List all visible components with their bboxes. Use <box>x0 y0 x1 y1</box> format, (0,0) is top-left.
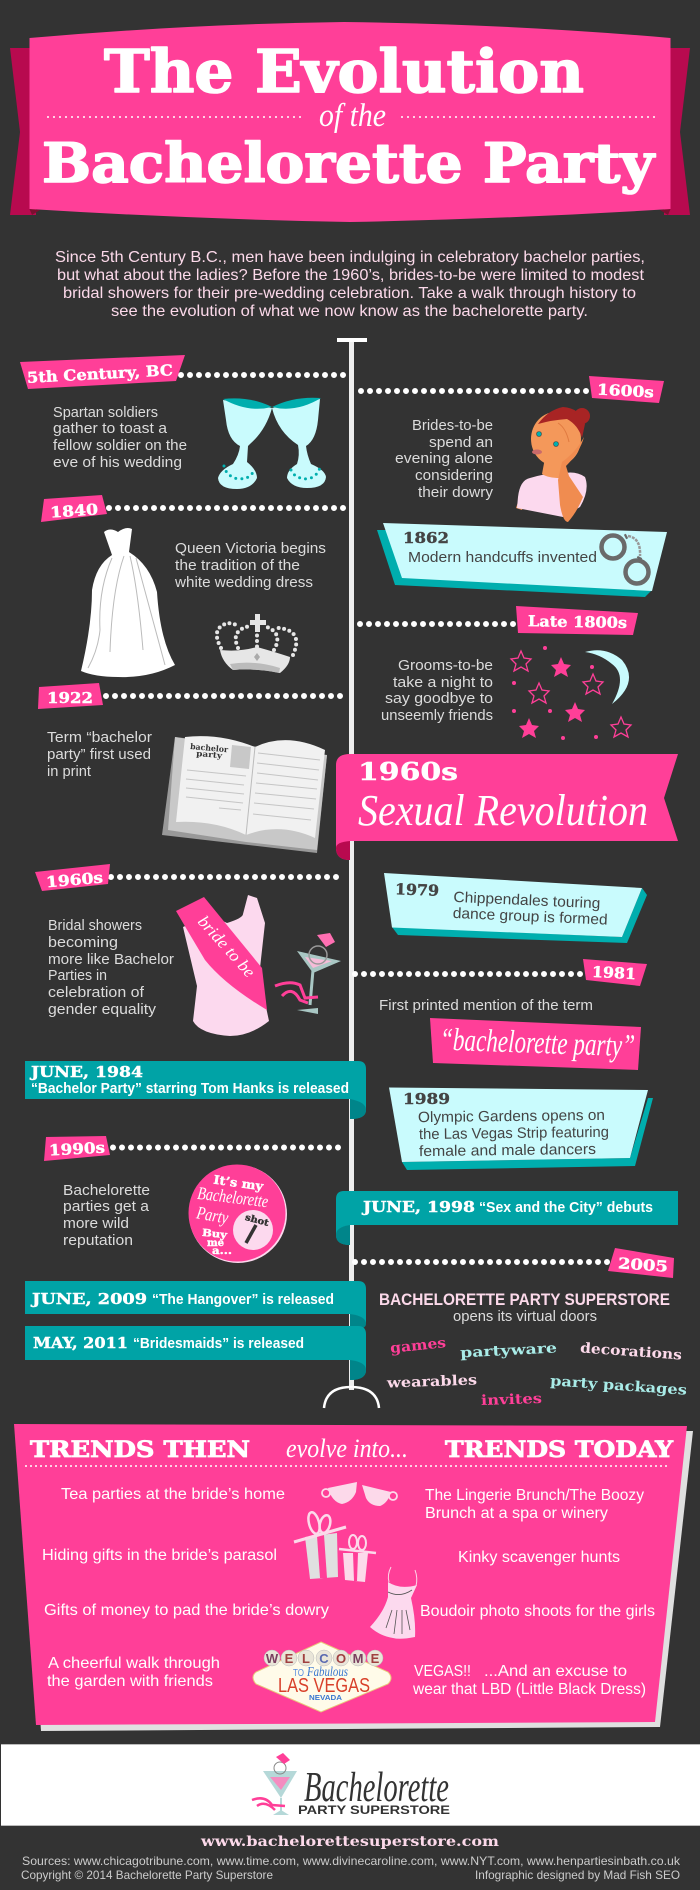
icon: open book <box>162 736 327 853</box>
word cloud: partyware <box>460 1340 558 1361</box>
text: Queen Victoria: Queen Victoria begins <box>175 540 326 557</box>
callout: 1862 handcuffs <box>377 523 667 597</box>
word cloud: games <box>389 1335 447 1357</box>
text: opens virtual doors: opens its virtual doors <box>453 1308 597 1325</box>
icon: white wedding dress <box>81 528 175 677</box>
text: Brides-to-be: their dowry <box>418 484 494 501</box>
icon: Las Vegas sign: O <box>336 1651 346 1666</box>
trends today column: ...And an excuse to <box>484 1663 627 1680</box>
title banner <box>10 22 690 222</box>
icon: night sky <box>511 646 631 740</box>
intro paragraph: Since 5th Century B.C., men have been indulging in celebratory bachelor parties, <box>55 249 645 266</box>
sources and credits <box>21 1854 681 1882</box>
icon: party button: Party <box>194 1202 230 1228</box>
text: bridal showers: gender equality <box>48 1001 157 1018</box>
icon: party button: Buy <box>201 1228 229 1241</box>
text: Brides-to-be: evening alone <box>395 450 493 467</box>
text: bridal showers: more like Bachelor <box>48 951 174 968</box>
callout: 1862 handcuffs: 1862 <box>403 529 449 547</box>
text: Brides-to-be: considering <box>415 467 493 484</box>
tag: 1600s <box>589 376 664 403</box>
callout: 1979 Chippendales: 1979 <box>395 880 439 900</box>
ribbon: June 1984 <box>25 1061 366 1119</box>
tag: 5th Century, BC: 5th Century, BC <box>27 361 173 387</box>
icon: thoughtful woman <box>516 407 590 522</box>
callout: 1989 Olympic Gardens <box>389 1088 653 1170</box>
text: first printed mention: First printed mention of the term <box>379 997 593 1014</box>
icon: open book: party <box>196 748 223 760</box>
panel: trends <box>14 1424 693 1731</box>
icon: Las Vegas sign: L <box>302 1651 310 1666</box>
text: bridal showers: Parties in <box>48 967 107 984</box>
intro paragraph: bridal showers for their pre-wedding celebration. Take a walk through history to <box>63 285 636 302</box>
text: Queen Victoria: the tradition of the <box>175 557 300 574</box>
icon: Las Vegas sign: C <box>319 1651 329 1666</box>
icon: party button: Bachelorette <box>196 1183 269 1211</box>
text: Spartan soldiers: gather to toast a <box>53 420 168 437</box>
icon: teacups <box>322 1482 397 1506</box>
ribbon: June 1984: “Bachelor Party” starring Tom Hanks is released <box>31 1080 349 1097</box>
callout: 1989 Olympic Gardens: 1989 <box>403 1090 450 1108</box>
icon: Las Vegas sign <box>253 1642 391 1712</box>
event: 1600s <box>361 376 664 522</box>
icon: crown <box>217 614 296 673</box>
ribbon: May 2011: MAY, 2011 <box>33 1334 128 1352</box>
tag: 1981 <box>583 959 647 986</box>
text: Grooms-to-be: unseemly friends <box>381 707 493 724</box>
icon: party button: It’s my <box>213 1173 265 1194</box>
tag: 1922 <box>38 683 103 709</box>
sources and credits: Sources: www.chicagotribune.com, www.time.com, www.divinecaroline.com, www.NYT.com, www.henpartiesinbath.co.uk <box>22 1854 681 1868</box>
callout: 1989 Olympic Gardens: Olympic Gardens opens on <box>418 1107 605 1126</box>
ribbon: May 2011 <box>25 1326 366 1380</box>
trends today column: VEGAS!! <box>414 1663 471 1680</box>
title line 2: Bachelorette Party <box>42 131 656 195</box>
event: 1960s <box>35 864 345 1036</box>
icon: party button: a... <box>212 1246 232 1257</box>
text: Brides-to-be: spend an <box>429 434 493 451</box>
icon: martini <box>275 933 341 1014</box>
event: Late 1800s <box>360 606 638 740</box>
event: 1981 <box>355 959 647 1070</box>
text: Spartan soldiers: fellow soldier on the <box>53 437 187 454</box>
icon: party button: me <box>207 1238 224 1249</box>
callout: 1979 Chippendales: dance group is formed <box>452 905 608 929</box>
text: bachelorette parties: reputation <box>63 1232 133 1249</box>
trends then column <box>42 1486 329 1690</box>
text: Grooms-to-be: say goodbye to <box>385 690 493 707</box>
ribbon: June 1984: JUNE, 1984 <box>29 1063 143 1081</box>
text: Queen Victoria: white wedding dress <box>174 574 313 591</box>
sources and credits: Copyright © 2014 Bachelorette Party Superstore <box>21 1868 273 1882</box>
word cloud <box>386 1335 688 1409</box>
icon: Las Vegas sign: M <box>353 1651 363 1666</box>
title line 1: The Evolution <box>104 37 584 106</box>
event: 1990s <box>44 1136 345 1263</box>
text: superstore heading: BACHELORETTE PARTY SUPERSTORE <box>379 1290 670 1309</box>
text: bridal showers <box>48 917 174 1018</box>
icon: party button: shot <box>244 1213 271 1229</box>
trends then column: Gifts of money to pad the bride’s dowry <box>44 1602 329 1619</box>
heading: trends then: TRENDS THEN <box>30 1437 250 1463</box>
tag: Late 1800s <box>516 606 638 635</box>
title connector: of the <box>319 98 386 134</box>
trends then column: the garden with friends <box>47 1673 213 1690</box>
text: bachelorette parties: parties get a <box>63 1198 150 1215</box>
tag: 1960s <box>35 864 110 891</box>
event: 2005 <box>355 1248 688 1409</box>
icon: tank top with sash: bride to be <box>194 912 259 982</box>
text: Queen Victoria <box>174 540 326 591</box>
trends today column: The Lingerie Brunch/The Boozy <box>425 1487 644 1504</box>
tag: 2005: 2005 <box>617 1254 669 1276</box>
ribbon: June 1998: JUNE, 1998 <box>361 1198 475 1216</box>
event: 1840 <box>41 495 345 677</box>
ribbon: May 2011: “Bridesmaids” is released <box>133 1335 304 1352</box>
logo: martini mark <box>252 1753 297 1815</box>
text: Brides-to-be <box>395 417 494 501</box>
logo: tagline: PARTY SUPERSTORE <box>298 1803 450 1817</box>
text: bridal showers: becoming <box>48 934 118 951</box>
icon: party button <box>188 1164 287 1263</box>
icon: tank top with sash <box>176 895 269 1036</box>
word cloud: invites <box>481 1391 542 1409</box>
icon: Las Vegas sign: W <box>266 1651 279 1666</box>
callout: 1862 handcuffs: Modern handcuffs invented <box>408 549 597 566</box>
ribbon: June 2009: “The Hangover” is released <box>152 1291 334 1308</box>
tag: 1600s: 1600s <box>597 381 654 402</box>
website url: www.bachelorettesuperstore.com <box>200 1834 499 1850</box>
text: Spartan soldiers <box>53 404 187 471</box>
trends today column: wear that LBD (Little Black Dress) <box>412 1681 646 1698</box>
icon: open book: bachelor <box>190 741 229 754</box>
text: Grooms-to-be: take a night to <box>393 674 493 691</box>
icon: Las Vegas sign: TO <box>293 1668 304 1679</box>
icon: toasting goblets <box>218 398 326 489</box>
trends then column: Tea parties at the bride’s home <box>61 1486 285 1503</box>
tag: 1840: 1840 <box>50 500 99 522</box>
text: bachelor party first used: party” first used <box>47 746 151 763</box>
tag: 1960s: 1960s <box>45 869 104 891</box>
icon: Las Vegas sign: E <box>285 1651 294 1666</box>
banner: 1960s Sexual Revolution <box>336 754 678 860</box>
footer logo band <box>1 1744 700 1826</box>
sources and credits: Infographic designed by Mad Fish SEO <box>475 1868 680 1882</box>
text: bachelor party first used: in print <box>47 763 92 780</box>
icon: Las Vegas sign: E <box>371 1651 380 1666</box>
tag: 1990s <box>44 1136 110 1161</box>
tag: 1981: 1981 <box>592 963 636 983</box>
event: 1922 <box>38 683 342 853</box>
trends then column: Hiding gifts in the bride’s parasol <box>42 1547 277 1564</box>
tag: 1840 <box>41 495 107 522</box>
callout: 1989 Olympic Gardens: female and male dancers <box>419 1141 596 1160</box>
trends today column: Brunch at a spa or winery <box>425 1505 608 1522</box>
text: bachelor party first used: Term “bachelor <box>47 729 152 746</box>
ribbon: June 2009 <box>25 1281 366 1330</box>
logo: wordmark: Bachelorette <box>304 1765 449 1811</box>
tag: 5th Century, BC <box>20 355 185 389</box>
text: Spartan soldiers: eve of his wedding <box>53 454 182 471</box>
word cloud: wearables <box>386 1372 477 1392</box>
word cloud: decorations <box>580 1340 683 1364</box>
ribbon: June 1998 <box>336 1191 678 1245</box>
heading: evolve into: evolve into... <box>286 1434 408 1463</box>
tag: 2005 <box>608 1248 674 1278</box>
trends today column: Kinky scavenger hunts <box>458 1549 620 1566</box>
ribbon: June 1998: “Sex and the City” debuts <box>479 1199 653 1216</box>
event: 5th Century BC <box>20 355 345 489</box>
ribbon: June 2009: JUNE, 2009 <box>30 1290 147 1308</box>
trends today column: Boudoir photo shoots for the girls <box>420 1603 655 1620</box>
word cloud: party packages <box>550 1373 688 1399</box>
text: bridal showers: Bridal showers <box>48 917 142 934</box>
callout: bachelorette party <box>430 1018 641 1070</box>
callout: 1979 Chippendales: Chippendales touring <box>453 889 601 912</box>
intro paragraph: see the evolution of what we now know as the bachelorette party. <box>111 303 588 320</box>
text: Spartan soldiers: Spartan soldiers <box>53 404 158 421</box>
text: bachelorette parties: Bachelorette <box>63 1182 150 1199</box>
timeline spine <box>324 338 379 1408</box>
text: bachelorette parties <box>63 1182 150 1249</box>
icon: handcuffs <box>602 536 648 584</box>
text: bridal showers: celebration of <box>48 984 145 1001</box>
icon: Las Vegas sign: LAS VEGAS <box>278 1675 370 1697</box>
tag: 1922: 1922 <box>47 689 93 707</box>
icon: Las Vegas sign: Fabulous <box>306 1665 348 1680</box>
icon: gift boxes <box>294 1511 376 1582</box>
text: bachelorette parties: more wild <box>63 1215 129 1232</box>
intro paragraph <box>55 249 645 320</box>
text: Grooms-to-be: Grooms-to-be <box>398 657 493 674</box>
icon: Las Vegas sign: NEVADA <box>309 1695 342 1702</box>
callout: 1989 Olympic Gardens: the Las Vegas Strip featuring <box>419 1124 609 1143</box>
banner: 1960s Sexual Revolution: Sexual Revolution <box>358 786 648 835</box>
icon: lingerie <box>370 1567 417 1639</box>
tag: 1990s: 1990s <box>49 1139 105 1159</box>
banner: 1960s Sexual Revolution: 1960s <box>358 757 458 786</box>
heading: trends today: TRENDS TODAY <box>445 1437 673 1463</box>
text: Brides-to-be: Brides-to-be <box>412 417 493 434</box>
trends then column: A cheerful walk through <box>48 1655 220 1672</box>
text: bachelor party first used <box>47 729 152 780</box>
intro paragraph: but what about the ladies? Before the 1960’s, brides-to-be were limited to modest <box>57 267 645 284</box>
trends today column <box>412 1487 655 1698</box>
tag: Late 1800s: Late 1800s <box>528 612 627 632</box>
text: Grooms-to-be <box>381 657 493 724</box>
callout: 1979 Chippendales <box>384 873 647 943</box>
